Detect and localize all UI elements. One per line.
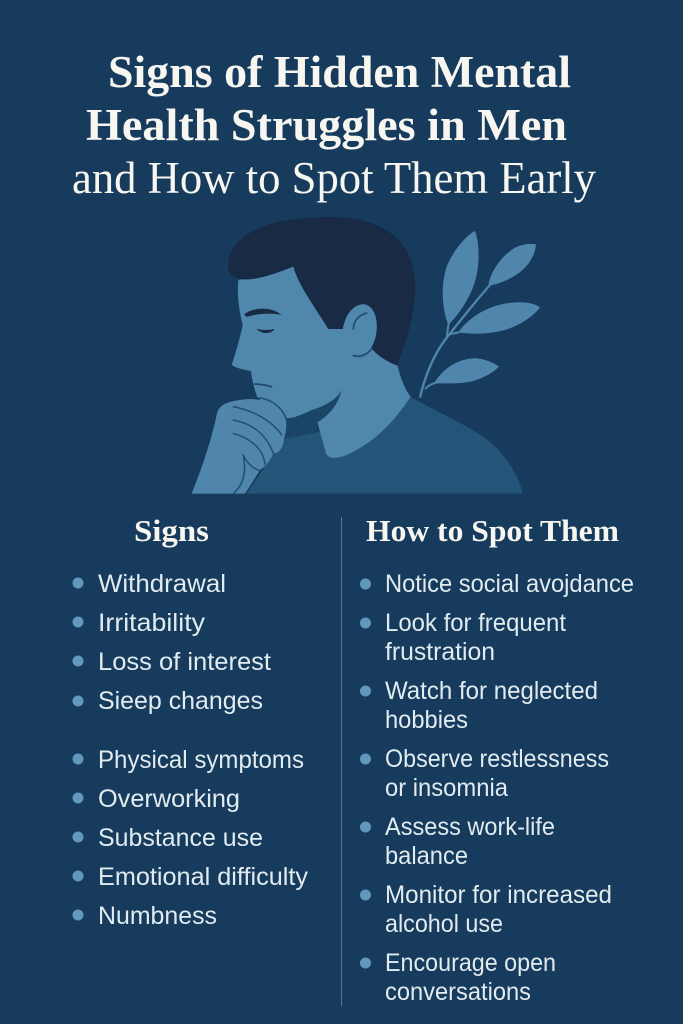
signs list: Substance use: [98, 824, 263, 852]
facial features: [244, 309, 372, 387]
spotting list: balance: [385, 842, 468, 870]
neck shadow: [283, 388, 342, 439]
signs list: Loss of interest: [98, 648, 271, 676]
column divider: [341, 517, 342, 1006]
signs list: Sieep changes: [98, 687, 263, 715]
spotting list: or insomnia: [385, 774, 508, 802]
spotting list: alcohol use: [385, 910, 503, 938]
spotting list: [360, 570, 634, 1006]
signs list: Emotional difficulty: [98, 863, 308, 891]
title: and How to Spot Them Early: [72, 153, 596, 203]
panel: signs: [72, 513, 308, 930]
spotting list: Look for frequent: [385, 609, 566, 637]
title: Signs of Hidden Mental: [108, 47, 571, 97]
spotting list: Observe restlessness: [385, 745, 609, 773]
spotting list: Notice social avojdance: [385, 570, 634, 598]
heading: signs: Signs: [134, 513, 209, 548]
icon: leaf branch: [420, 231, 540, 398]
signs list: Physical symptoms: [98, 746, 304, 774]
face: [232, 267, 367, 418]
spotting list: Watch for neglected: [385, 677, 598, 705]
hair: [228, 217, 415, 366]
signs list: Withdrawal: [98, 570, 226, 598]
spotting list: Monitor for increased: [385, 881, 612, 909]
ear: [343, 304, 377, 356]
hand: [192, 398, 286, 494]
spotting list: Encourage open: [385, 949, 556, 977]
title: Health Struggles in Men: [86, 100, 567, 150]
spotting list: conversations: [385, 978, 531, 1006]
spotting list: hobbies: [385, 706, 468, 734]
title: [72, 47, 596, 203]
spotting list: Assess work-life: [385, 813, 555, 841]
neck: [317, 345, 411, 458]
shirt: [247, 397, 523, 494]
signs list: Overworking: [98, 785, 240, 813]
panel: how to spot them: [360, 513, 634, 1006]
signs list: Numbness: [98, 902, 217, 930]
signs list: Irritability: [98, 609, 206, 637]
illustration: thoughtful man with leaf branch: [192, 217, 540, 494]
signs list: [72, 570, 308, 930]
heading: how to spot them: How to Spot Them: [366, 513, 619, 548]
spotting list: frustration: [385, 638, 495, 666]
